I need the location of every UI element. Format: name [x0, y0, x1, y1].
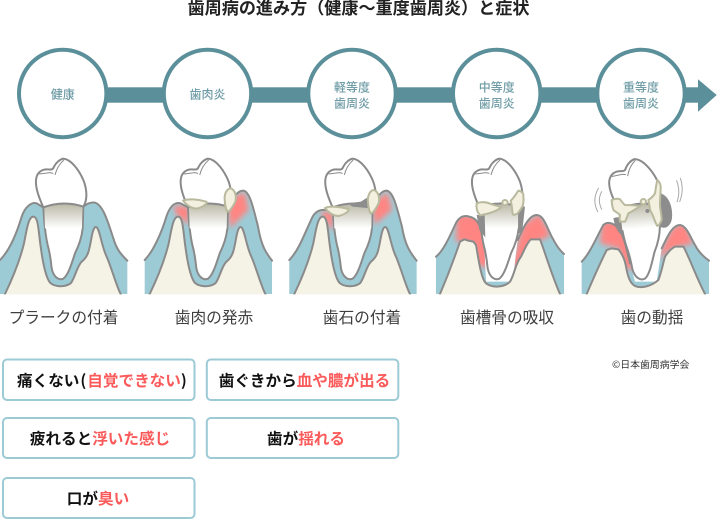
tartar [183, 188, 236, 212]
bone [3, 217, 123, 300]
calculus deposit [348, 197, 371, 208]
gum outline [0, 202, 127, 261]
gum inflammation [456, 213, 551, 268]
stage circle: moderate periodontitis: 歯周炎 [479, 94, 515, 112]
tooth [181, 159, 231, 279]
symptom box: loose tooth [207, 418, 398, 458]
tooth diagram 5: tooth mobility [582, 157, 709, 300]
stage circle: severe periodontitis: 重等度 [623, 78, 659, 96]
tooth diagram 2: gum redness [145, 159, 272, 300]
tartar [325, 190, 379, 216]
stage circle: moderate periodontitis: 中等度 [479, 78, 515, 96]
stage circle: moderate periodontitis [453, 50, 540, 137]
stage circle: severe periodontitis: 歯周炎 [623, 94, 659, 112]
stage circle: healthy: 健康 [51, 86, 75, 102]
symptom box: bleeding gums: 歯ぐきから血や膿が出る [219, 369, 390, 391]
caption: gum redness: 歯肉の発赤 [175, 305, 254, 328]
calculus deposit [613, 193, 672, 238]
copyright: ©日本歯周病学会 [612, 357, 689, 371]
symptom box: floating feeling [3, 418, 194, 458]
arrow shaft [62, 87, 702, 103]
caption: tooth mobility: 歯の動揺 [621, 305, 683, 328]
gum [0, 202, 127, 294]
calculus deposit [477, 207, 525, 237]
tooth [607, 157, 668, 282]
motion lines [595, 178, 682, 212]
tooth [472, 159, 522, 279]
tartar [476, 191, 524, 215]
symptom box: floating feeling: 疲れると浮いた感じ [30, 427, 170, 449]
gum [145, 191, 272, 294]
symptom box: bleeding gums [207, 360, 398, 400]
stage circle: mild periodontitis [308, 50, 396, 137]
tooth diagram 3: calculus [289, 159, 417, 300]
timeline arrow [62, 79, 717, 112]
gum outline [145, 191, 272, 261]
tartar [612, 180, 662, 226]
symptom box: loose tooth: 歯が揺れる [267, 427, 345, 449]
bone [147, 217, 268, 300]
stage circle: mild periodontitis: 軽等度 [334, 78, 370, 96]
symptom box: no pain: 痛くない(自覚できない) [17, 369, 187, 391]
tooth diagram 1: plaque [0, 159, 127, 300]
arrow head [698, 79, 717, 112]
bone [438, 239, 563, 300]
stage circle: gingivitis [164, 50, 251, 137]
symptom box: bad breath: 口が臭い [67, 487, 129, 509]
gum [289, 191, 417, 294]
gum outline [436, 215, 564, 257]
symptom box: no pain [3, 360, 194, 400]
stage circle: mild periodontitis: 歯周炎 [334, 94, 370, 112]
gum outline [289, 191, 417, 261]
stage circle: healthy [19, 50, 106, 137]
gum inflammation [600, 222, 693, 270]
gum outline [582, 223, 709, 263]
gum inflammation [320, 192, 392, 232]
tooth diagram 4: bone resorption [436, 159, 564, 300]
caption: bone resorption: 歯槽骨の吸収 [460, 305, 554, 328]
caption: calculus: 歯石の付着 [323, 305, 401, 328]
stage circle: severe periodontitis [597, 50, 685, 137]
tooth [325, 159, 376, 279]
stage circle: gingivitis: 歯肉炎 [189, 86, 226, 102]
bone [292, 217, 413, 300]
caption: plaque: プラークの付着 [9, 305, 118, 328]
gum [436, 215, 564, 294]
gum [582, 223, 709, 294]
tooth [36, 159, 86, 279]
bone [584, 247, 708, 300]
gum inflammation [173, 192, 249, 228]
symptom box: bad breath [3, 478, 194, 518]
